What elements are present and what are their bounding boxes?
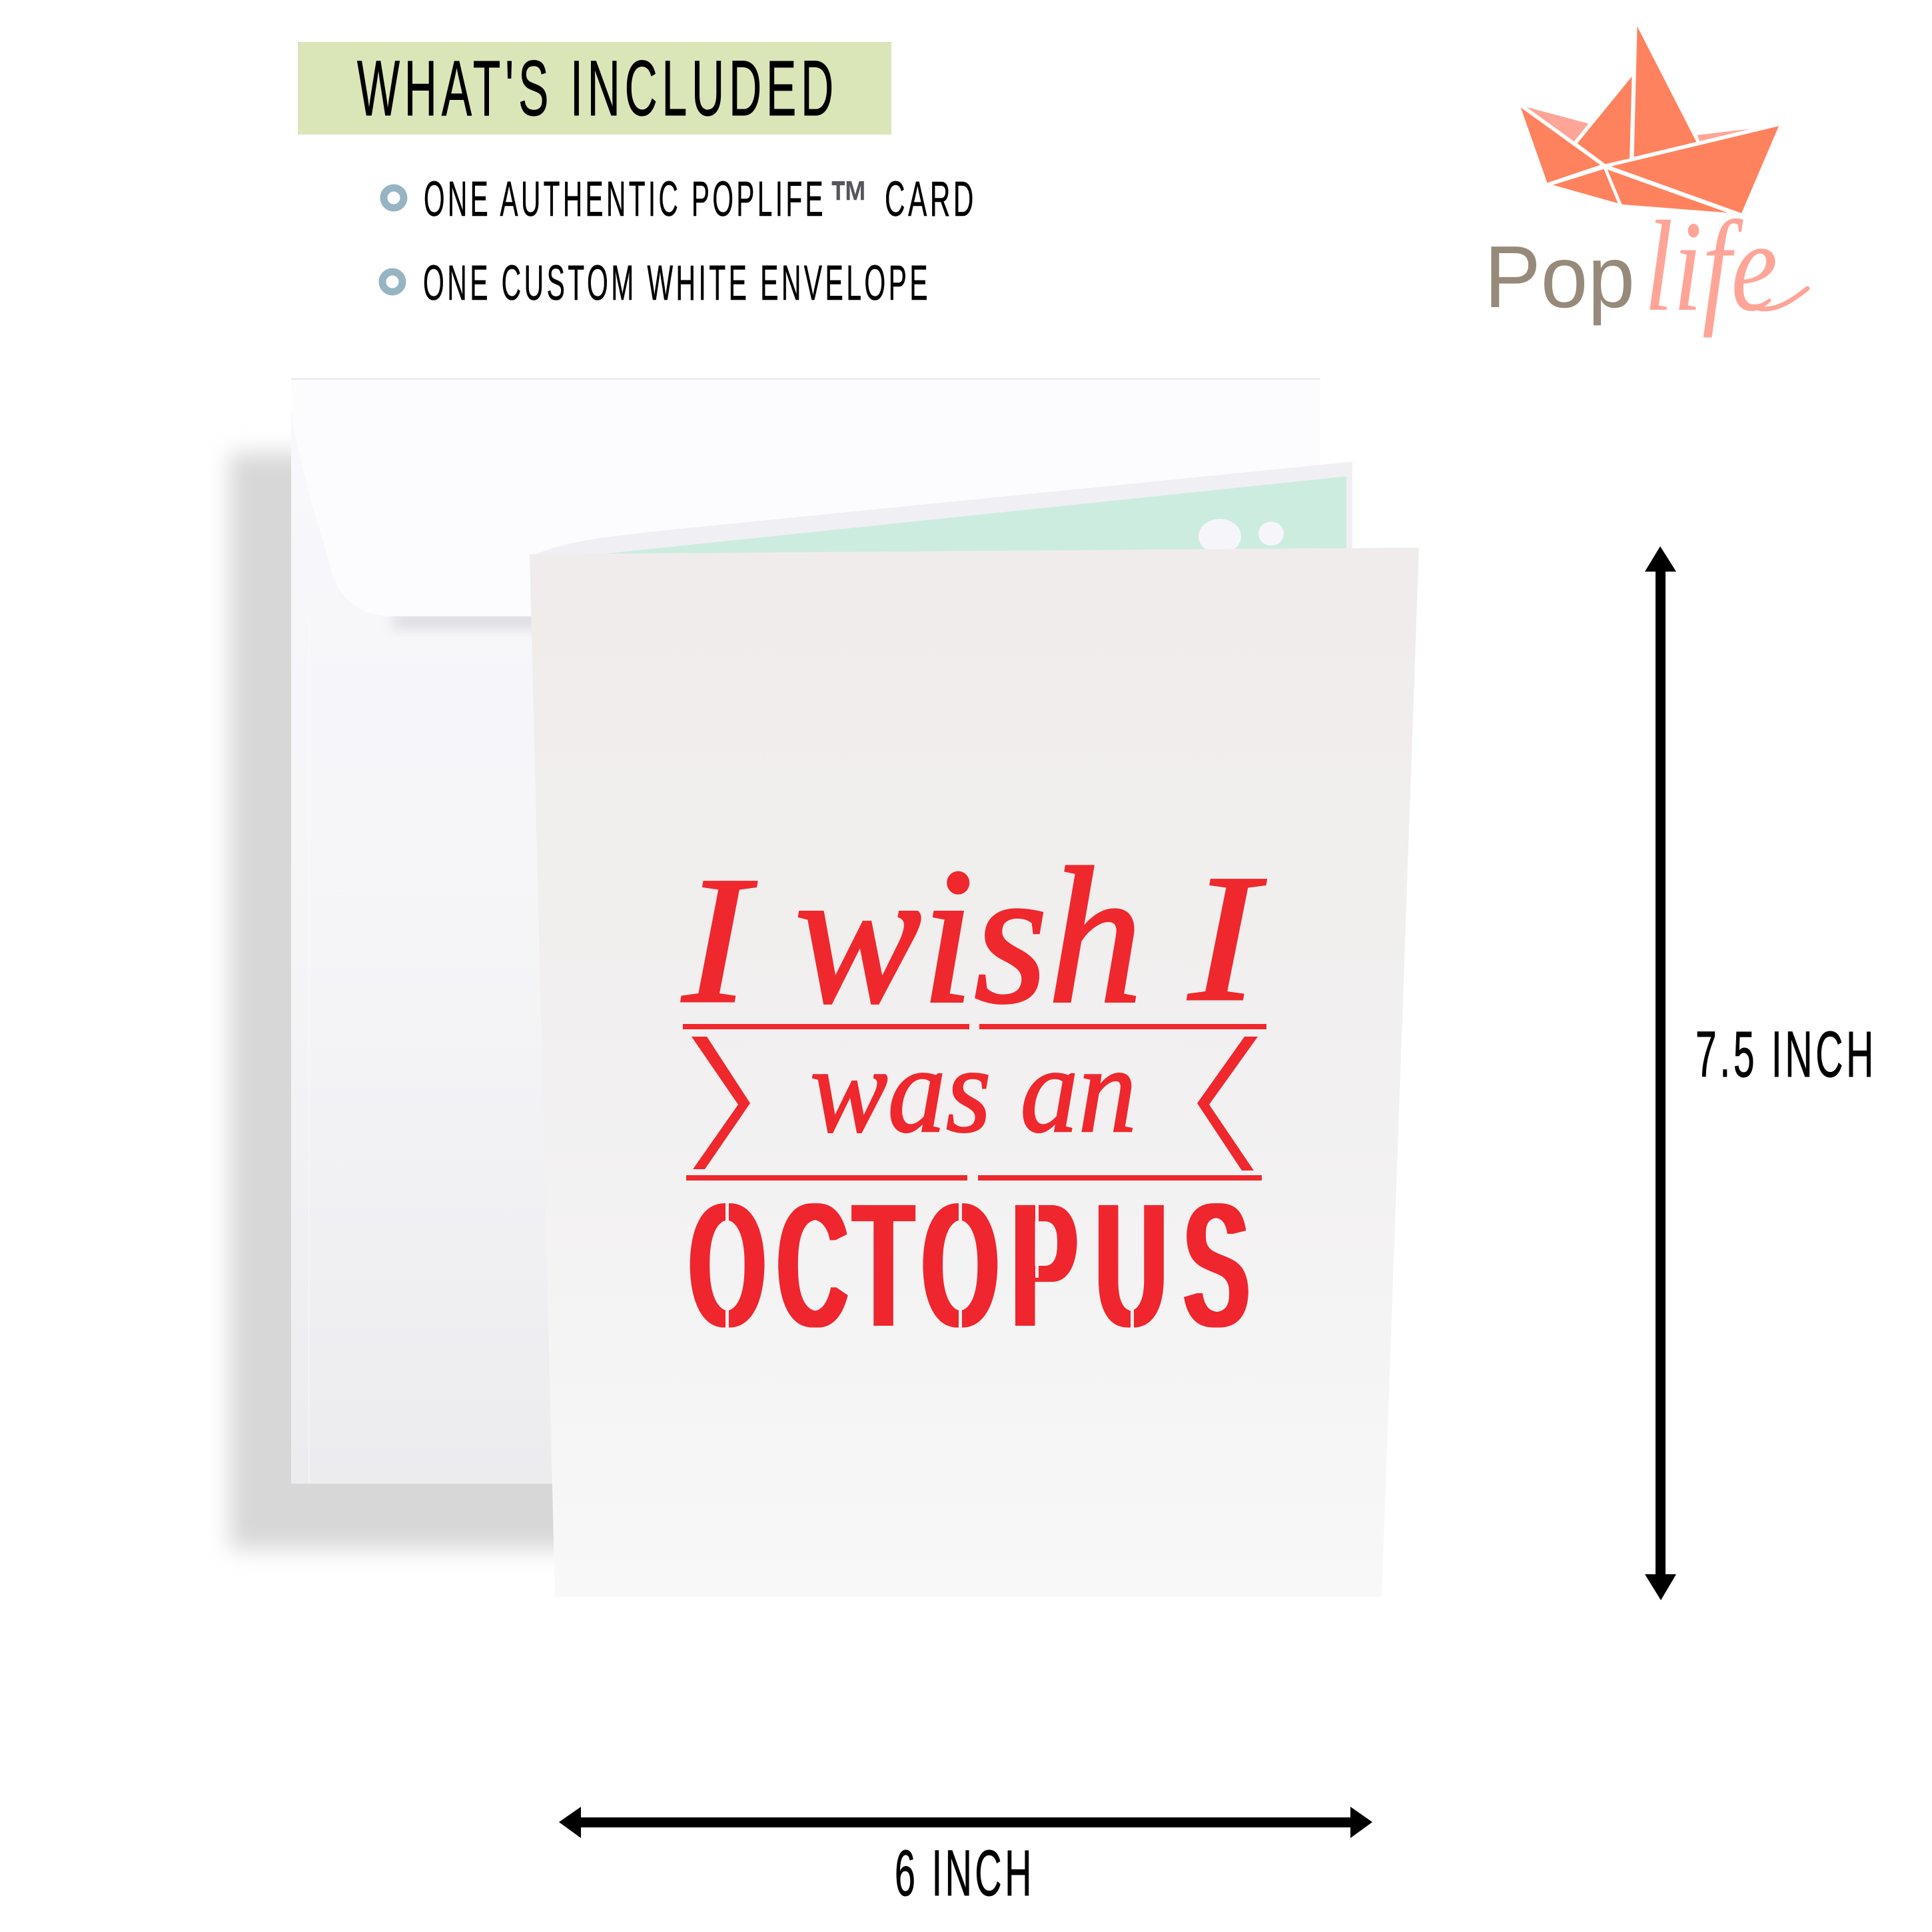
card inner page	[536, 462, 1352, 554]
photo: envelope and card	[230, 378, 1419, 1597]
list item: custom envelope	[382, 255, 931, 310]
card text: I wish I: I	[1185, 837, 1266, 1039]
label: 6 inch: 6 INCH	[895, 1837, 1035, 1909]
envelope flap	[291, 379, 1320, 620]
logo: poplife	[1484, 27, 1807, 338]
arrow: width dimension	[559, 1807, 1372, 1838]
list of included items	[382, 169, 977, 310]
banner	[683, 1024, 1266, 1181]
card text: I wish I: I	[679, 839, 757, 1041]
shadow under flap	[393, 613, 546, 629]
list item: authentic card: ONE AUTHENTIC POPLIFE	[424, 171, 826, 227]
list item: authentic card	[384, 169, 977, 236]
list item: custom envelope: ONE CUSTOM WHITE ENVELOPE	[423, 255, 931, 310]
heading: what's included: WHAT'S INCLUDED	[357, 45, 838, 133]
wordmark: life	[1644, 195, 1777, 338]
icon: origami boat	[1521, 27, 1779, 213]
card text: I wish I	[679, 829, 1266, 1044]
envelope shadow	[230, 453, 696, 1549]
wordmark	[1484, 195, 1807, 338]
heading: what's included	[298, 42, 891, 135]
card front	[530, 548, 1419, 1597]
card text: was an: was an	[810, 1022, 1137, 1158]
list item: authentic card: ™	[829, 169, 869, 236]
envelope body	[291, 413, 1320, 1484]
card text: octopus: OCTOPUS	[688, 1163, 1250, 1366]
arrow: height dimension	[1645, 546, 1676, 1600]
card text: I wish I: wish	[795, 829, 1143, 1044]
wordmark: Pop	[1484, 228, 1635, 326]
list item: authentic card: CARD	[885, 171, 977, 227]
